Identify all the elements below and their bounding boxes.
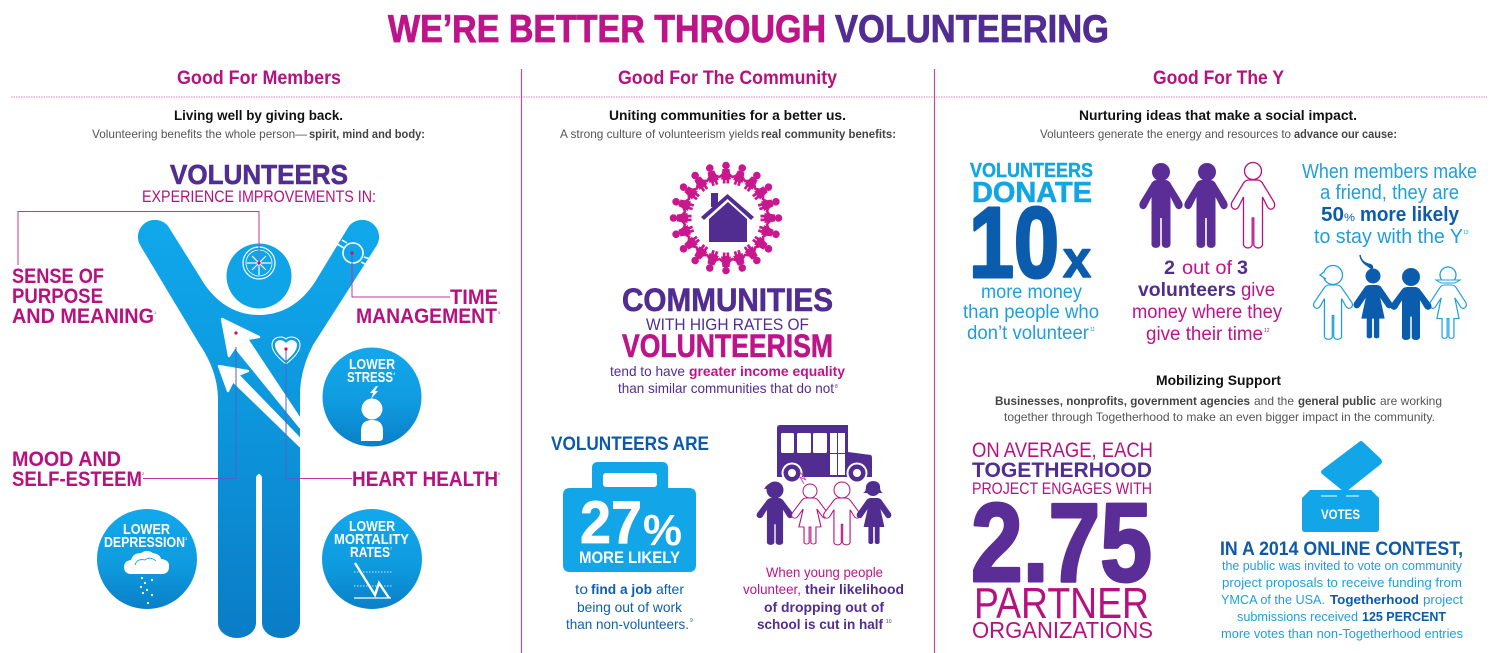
subheading: uniting communities: Uniting communities for a better us. [609, 107, 846, 123]
icon: four friends holding hands [1314, 255, 1466, 340]
text: communities with high rates of volunteerism: 8 [835, 384, 838, 390]
intro text: community [560, 127, 896, 141]
text: young people volunteering: school is cut in half [757, 616, 883, 632]
circle: lower depression [97, 509, 197, 609]
circle: lower depression: 3 [185, 536, 188, 541]
heading: good for the community: Good For The Community [618, 68, 837, 89]
text: mobilizing support: together through Togetherhood to make an even bigger impact in the community. [1004, 410, 1435, 424]
icon: heart [272, 337, 300, 364]
text: members make a friend: more likely [1360, 204, 1460, 226]
text: members make a friend: to stay with the Y [1314, 226, 1463, 248]
circle: lower mortality rates: RATES [350, 545, 390, 561]
label: sense of purpose and meaning [12, 265, 157, 328]
circle: lower mortality rates: LOWER [349, 519, 395, 535]
text: mobilizing support: Businesses, nonprofits, government agencies [995, 394, 1250, 408]
circle: lower stress: 4 [393, 371, 396, 376]
heading: volunteers experience improvements [142, 159, 376, 206]
text: members make a friend: When members make [1302, 161, 1477, 183]
label: heart health: HEART HEALTH [352, 468, 498, 491]
text: members make a friend: 50 [1321, 204, 1344, 226]
text: young people volunteering: their likelihood [805, 581, 904, 597]
subheading: nurturing ideas: Nurturing ideas that make a social impact. [1079, 107, 1357, 123]
intro text: community: real community benefits: [761, 127, 896, 141]
heading: good for members: Good For Members [177, 68, 341, 89]
stat: 27 percent more likely: being out of work [577, 599, 683, 615]
icon: growth arrows [219, 319, 300, 446]
label: sense of purpose and meaning: AND MEANING [12, 305, 154, 328]
icon: ring of people around house [670, 162, 782, 274]
text: communities with high rates of volunteerism: COMMUNITIES [622, 282, 833, 318]
text: 2014 online contest: project [1423, 592, 1463, 607]
label: sense of purpose and meaning: 1 [154, 310, 157, 315]
stat: 2.75 partner organizations [971, 438, 1153, 643]
connector lines [18, 212, 450, 478]
text: 2 out of 3 volunteers: volunteers [1138, 280, 1236, 301]
stat: volunteers donate 10x: 10 [969, 187, 1059, 299]
label: mood and self-esteem [12, 448, 145, 491]
text: 2014 online contest: 125 PERCENT [1362, 609, 1446, 624]
circle: lower mortality rates [322, 509, 422, 609]
label: sense of purpose and meaning: PURPOSE [12, 285, 103, 308]
heading: volunteers experience improvements: EXPERIENCE IMPROVEMENTS IN: [142, 187, 376, 206]
label: time management: TIME [450, 286, 498, 309]
label: heart health: 6 [498, 471, 501, 476]
text: 2014 online contest: YMCA of the USA. [1221, 592, 1325, 607]
stat: 27 percent more likely: VOLUNTEERS ARE [551, 434, 709, 455]
stat: volunteers donate 10x [963, 160, 1099, 344]
text: communities with high rates of volunteerism: than similar communities that do not [618, 380, 834, 396]
stat: 27 percent more likely: after [656, 581, 684, 597]
stat: 2.75 partner organizations: ON AVERAGE, EACH [972, 438, 1153, 462]
icon: briefcase [563, 462, 696, 572]
stat: volunteers donate 10x: VOLUNTEERS [970, 160, 1093, 182]
title [388, 8, 1109, 51]
icon: school bus [777, 425, 872, 484]
text: mobilizing support: Mobilizing Support [1156, 372, 1281, 388]
intro text: members: spirit, mind and body: [309, 127, 425, 141]
stat: volunteers donate 10x: x [1063, 231, 1091, 289]
text: 2014 online contest [1220, 538, 1463, 641]
text: 2014 online contest: Togetherhood [1330, 592, 1419, 607]
stat: volunteers donate 10x: 11 [1090, 327, 1095, 333]
label: mood and self-esteem: 2 [142, 471, 145, 476]
text: 2014 online contest: submissions received [1237, 609, 1358, 624]
text: 2 out of 3 volunteers: 12 [1264, 328, 1270, 334]
stat: 27 percent more likely: than non-volunteers. [566, 616, 689, 632]
icon: ballot box [1302, 441, 1382, 532]
stat: volunteers donate 10x: don’t volunteer [967, 323, 1090, 344]
panel: good for the community [551, 68, 904, 632]
text: young people volunteering [743, 564, 904, 632]
panel: good for members [12, 68, 501, 638]
text: 2 out of 3 volunteers: give [1241, 280, 1275, 301]
text: 2014 online contest: project proposals to receive funding from [1222, 575, 1462, 590]
label: time management: 5 [498, 310, 501, 315]
text: 2 out of 3 volunteers: 2 [1164, 258, 1175, 279]
heading: good for the y: Good For The Y [1153, 68, 1284, 89]
text: communities with high rates of volunteerism: VOLUNTEERISM [622, 328, 833, 364]
stat: 2.75 partner organizations: PROJECT ENGAGES WITH [972, 479, 1152, 498]
subheading: living well: Living well by giving back. [174, 107, 343, 123]
intro text: the y: advance our cause: [1294, 127, 1397, 141]
title: VOLUNTEERING [835, 8, 1109, 51]
label: mood and self-esteem: SELF-ESTEEM [12, 468, 142, 491]
icon: briefcase: % [643, 506, 682, 555]
text: mobilizing support [995, 372, 1442, 424]
icon: four children holding hands [757, 472, 891, 545]
heading: volunteers experience improvements: VOLUNTEERS [170, 159, 348, 190]
text: mobilizing support: are working [1380, 394, 1442, 408]
label: time management: MANAGEMENT [356, 305, 497, 328]
text: communities with high rates of volunteerism: WITH HIGH RATES OF [646, 315, 809, 334]
text: members make a friend: a friend, they are [1320, 182, 1459, 204]
stat: volunteers donate 10x: more money [981, 282, 1082, 303]
stat: 27 percent more likely: find a job [591, 581, 652, 597]
text: communities with high rates of volunteerism: tend to have [610, 363, 685, 379]
stat: 2.75 partner organizations: 2.75 [971, 481, 1152, 605]
icon: compass [243, 247, 275, 279]
circle: lower depression: DEPRESSION [104, 535, 185, 551]
text: members make a friend: % [1344, 212, 1355, 224]
circle: lower stress: LOWER [349, 357, 395, 373]
intro text: the y: Volunteers generate the energy and resources to [1040, 127, 1291, 141]
text: young people volunteering: volunteer, [743, 581, 801, 597]
intro text: community: A strong culture of volunteerism yields [560, 127, 759, 141]
text: mobilizing support: general public [1298, 394, 1376, 408]
text: mobilizing support: and the [1254, 394, 1294, 408]
stat: volunteers donate 10x: DONATE [972, 177, 1092, 209]
stat: 2.75 partner organizations: PARTNER [974, 579, 1149, 628]
text: 2014 online contest: more votes than non-Togetherhood entries [1221, 626, 1463, 641]
stat: volunteers donate 10x: than people who [963, 302, 1099, 323]
circle: lower mortality rates: 7 [390, 546, 393, 551]
stat: 2.75 partner organizations: ORGANIZATIONS [972, 617, 1153, 643]
text: 2 out of 3 volunteers: money where they [1132, 302, 1282, 323]
icon: briefcase: 27 [580, 489, 642, 556]
circle: lower stress: STRESS [347, 370, 393, 386]
text: communities with high rates of volunteerism: greater income equality [689, 363, 845, 379]
icon: ballot box: VOTES [1321, 506, 1360, 522]
label: time management [356, 286, 501, 328]
text: young people volunteering: of dropping out of [764, 599, 884, 615]
text: members make a friend: 13 [1463, 230, 1469, 236]
text: 2 out of 3 volunteers [1132, 258, 1282, 345]
label: mood and self-esteem: MOOD AND [12, 448, 121, 471]
circle: lower mortality rates: MORTALITY [334, 532, 409, 548]
text: 2 out of 3 volunteers: 3 [1237, 258, 1248, 279]
stat: 27 percent more likely [551, 434, 709, 632]
text: 2014 online contest: the public was invited to vote on community [1222, 558, 1462, 573]
text: members make a friend [1302, 161, 1477, 248]
figure: volunteer with raised arms [138, 220, 379, 638]
stat: 27 percent more likely: to [575, 581, 588, 597]
icon: watch [337, 240, 370, 265]
circle: lower depression: LOWER [123, 522, 170, 538]
text: 2014 online contest: IN A 2014 ONLINE CONTEST, [1220, 538, 1463, 560]
text: young people volunteering: 10 [886, 619, 892, 625]
label: sense of purpose and meaning: SENSE OF [12, 265, 104, 288]
text: 2 out of 3 volunteers: out of [1182, 258, 1233, 279]
icon: three people, two filled [1139, 162, 1275, 248]
text: communities with high rates of volunteerism [610, 282, 845, 396]
circle: lower stress [322, 348, 422, 446]
title: WE’RE BETTER THROUGH [388, 8, 826, 51]
intro text: members [92, 127, 425, 141]
text: young people volunteering: When young people [766, 564, 883, 580]
icon: briefcase: MORE LIKELY [579, 548, 681, 567]
intro text: members: Volunteering benefits the whole person— [92, 127, 307, 141]
stat: 2.75 partner organizations: TOGETHERHOOD [972, 458, 1152, 482]
panel: good for the y [963, 68, 1477, 643]
text: 2 out of 3 volunteers: give their time [1146, 324, 1263, 345]
stat: 27 percent more likely: 9 [690, 618, 693, 624]
